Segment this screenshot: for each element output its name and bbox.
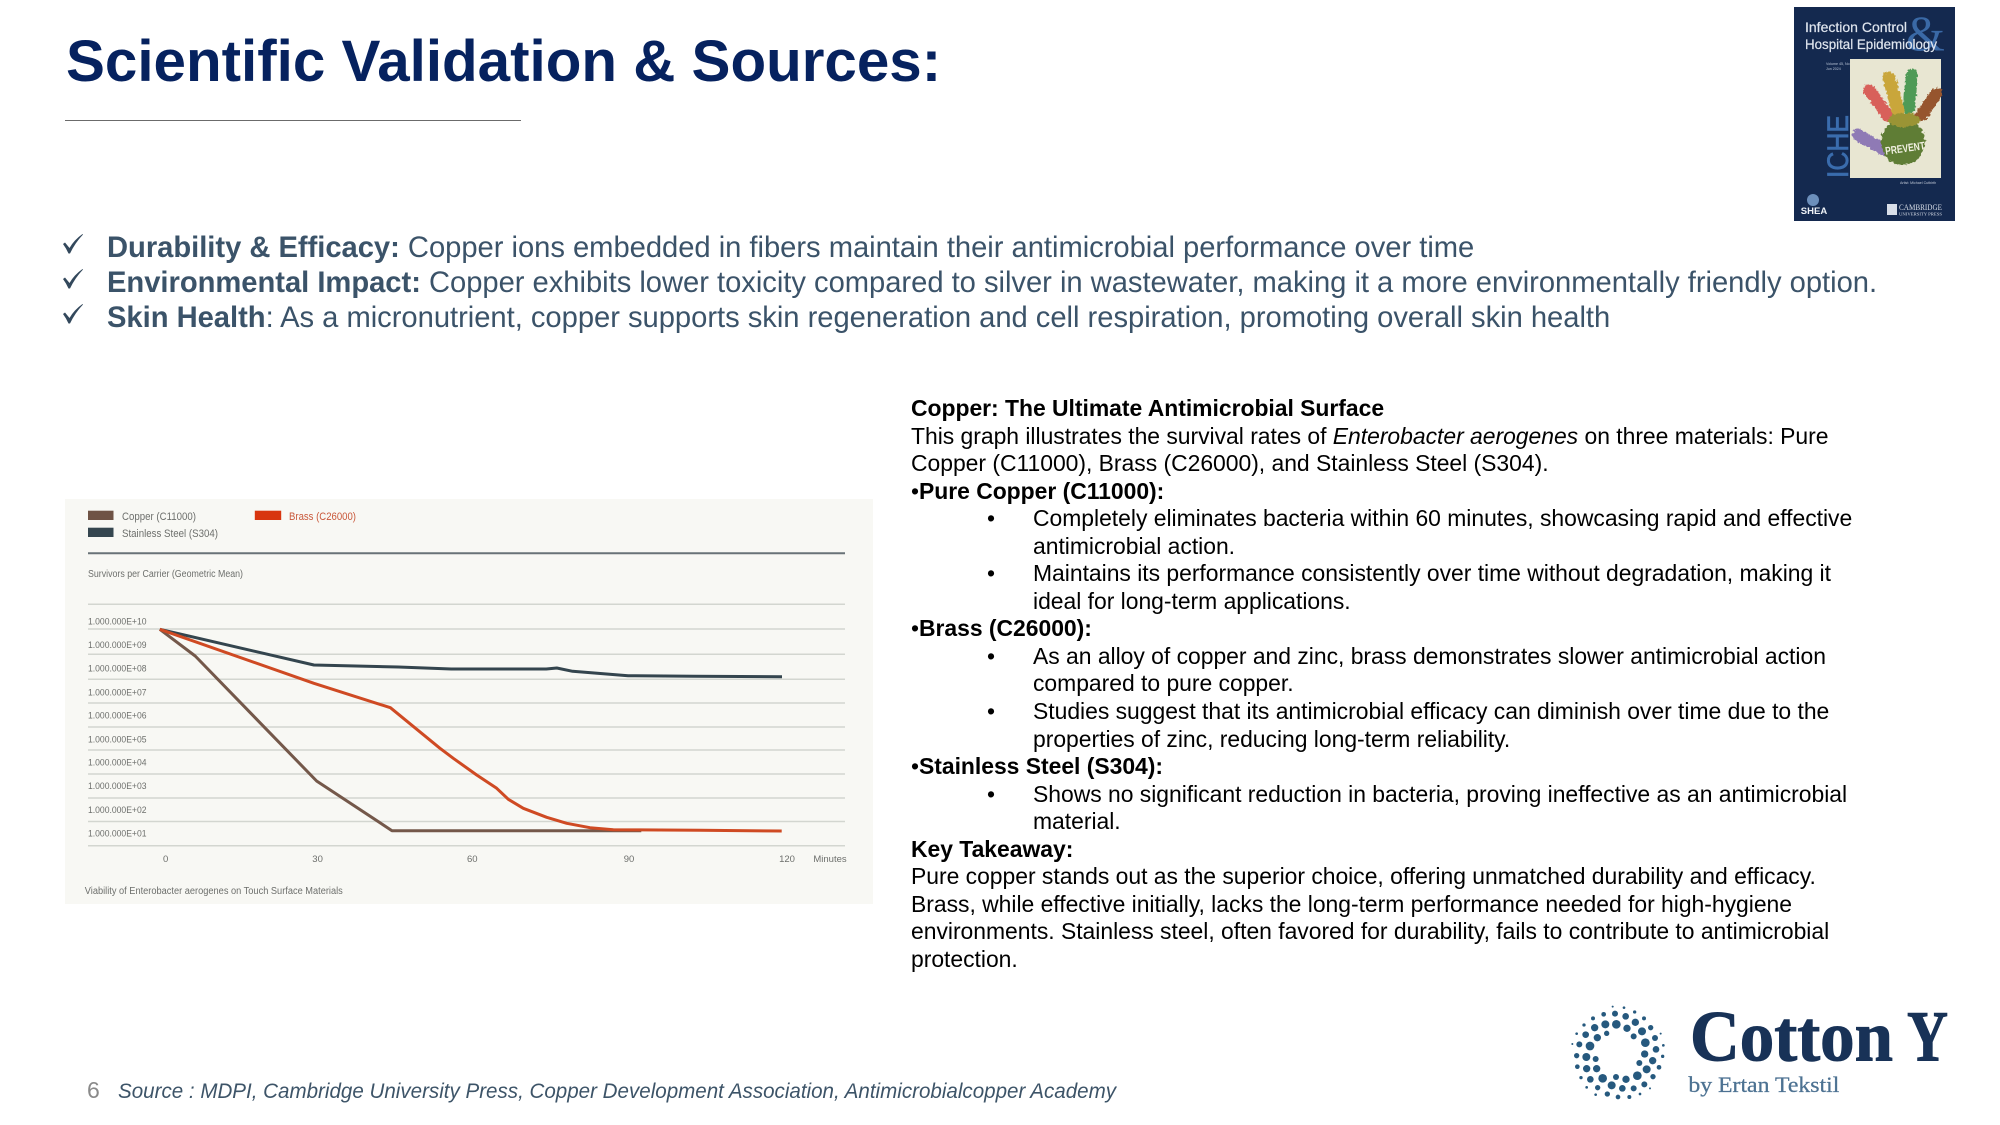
y axis labels: 1.000.000E+01 (88, 828, 146, 840)
explanatory text: Copper, the ultimate antimicrobial surface: •Brass (C26000): (911, 615, 1092, 641)
explanatory text: Copper, the ultimate antimicrobial surface: Completely eliminates bacteria within 60 minutes, showcasing rapid and effective (1033, 505, 1852, 531)
y axis labels: 1.000.000E+09 (88, 640, 146, 651)
slide number: 6 (87, 1077, 100, 1103)
logo: Cotton Y by Ertan Tekstil (1571, 997, 1948, 1100)
explanatory text: Copper, the ultimate antimicrobial surface (911, 395, 1852, 972)
explanatory text: Copper, the ultimate antimicrobial surface: Key Takeaway: (911, 836, 1073, 862)
x axis labels: Minutes (813, 854, 847, 865)
explanatory text: Copper, the ultimate antimicrobial surface: •Pure Copper (C11000): (911, 478, 1164, 504)
icon: check mark (63, 269, 83, 288)
series: copper (160, 629, 641, 831)
chart legend: Copper (C11000) (122, 511, 196, 523)
x axis labels: 90 (624, 854, 634, 865)
explanatory text: Copper, the ultimate antimicrobial surface: compared to pure copper. (1033, 670, 1294, 696)
explanatory text: Copper, the ultimate antimicrobial surface: antimicrobial action. (1033, 533, 1235, 559)
benefit: environmental impact: Environmental Impact: Copper exhibits lower toxicity compared to silver in wastewater, making it a more environmentally friendly option. (107, 267, 1877, 299)
y axis labels: 1.000.000E+02 (88, 805, 146, 816)
chart caption: Viability of Enterobacter aerogenes on Touch Surface Materials (85, 886, 343, 897)
x axis labels: 120 (779, 854, 795, 865)
journal cover: Infection Control & Hospital Epidemiology: Volume 45, No 6 (1826, 62, 1853, 66)
journal cover: Infection Control & Hospital Epidemiology: Infection Control (1805, 19, 1907, 35)
chart legend: Brass (C26000) (289, 511, 356, 523)
explanatory text: Copper, the ultimate antimicrobial surface: Studies suggest that its antimicrobial efficacy can diminish over time due to the (1033, 698, 1829, 724)
explanatory text: Copper, the ultimate antimicrobial surface: As an alloy of copper and zinc, brass demonstrates slower antimicrobial action (1033, 643, 1826, 669)
y axis labels (88, 616, 146, 840)
chart legend (88, 511, 356, 540)
explanatory text: Copper, the ultimate antimicrobial surface: • (987, 643, 995, 669)
explanatory text: Copper, the ultimate antimicrobial surface: This graph illustrates the survival rates of Enterobacter aerogenes on three materials: Pure (911, 423, 1828, 449)
explanatory text: Copper, the ultimate antimicrobial surface: Pure copper stands out as the superior choice, offering unmatched durability and efficacy. (911, 863, 1816, 889)
explanatory text: Copper, the ultimate antimicrobial surface: Maintains its performance consistently over time without degradation, making it (1033, 560, 1831, 586)
icon: check mark (63, 304, 83, 324)
journal cover: Infection Control & Hospital Epidemiology: SHEA (1801, 206, 1827, 217)
y axis labels: 1.000.000E+06 (88, 710, 146, 722)
y axis labels: 1.000.000E+03 (88, 781, 146, 792)
benefit: durability: Durability & Efficacy: Copper ions embedded in fibers maintain their antimicrobial performance over time (107, 232, 1474, 264)
explanatory text: Copper, the ultimate antimicrobial surface: Copper: The Ultimate Antimicrobial Surface (911, 395, 1384, 421)
journal cover: Infection Control & Hospital Epidemiology: ICHE (1822, 115, 1855, 178)
explanatory text: Copper, the ultimate antimicrobial surface: protection. (911, 946, 1018, 972)
y axis labels: 1.000.000E+08 (88, 664, 146, 674)
explanatory text: Copper, the ultimate antimicrobial surface: • (987, 698, 995, 724)
x axis labels: 0 (163, 854, 168, 865)
series: brass (160, 629, 782, 831)
x axis labels (163, 854, 847, 865)
x axis labels: 60 (467, 854, 478, 865)
icon: dotted ring (1571, 1006, 1665, 1099)
y axis labels: 1.000.000E+05 (88, 734, 146, 746)
logo: Cotton Y by Ertan Tekstil: Y (1907, 997, 1948, 1077)
explanatory text: Copper, the ultimate antimicrobial surface: • (987, 560, 995, 586)
explanatory text: Copper, the ultimate antimicrobial surface: Shows no significant reduction in bacteria, proving ineffective as an antimicrobial (1033, 781, 1847, 807)
explanatory text: Copper, the ultimate antimicrobial surface: properties of zinc, reducing long-term reliability. (1033, 726, 1510, 752)
explanatory text: Copper, the ultimate antimicrobial surface: •Stainless Steel (S304): (911, 753, 1163, 779)
journal cover: Infection Control & Hospital Epidemiology (1794, 7, 1955, 221)
journal cover: Infection Control & Hospital Epidemiology: CAMBRIDGE (1899, 203, 1942, 212)
explanatory text: Copper, the ultimate antimicrobial surface: environments. Stainless steel, often favored for durability, fails to contribute to antimicrobial (911, 918, 1829, 944)
line chart: survivors per carrier over time (65, 499, 873, 904)
icon: check mark (63, 234, 83, 254)
journal cover: Infection Control & Hospital Epidemiology: Jun 2024 (1826, 67, 1841, 71)
y axis labels: 1.000.000E+07 (88, 688, 146, 698)
y axis labels: 1.000.000E+04 (88, 758, 146, 768)
explanatory text: Copper, the ultimate antimicrobial surface: • (987, 505, 995, 531)
journal cover: Infection Control & Hospital Epidemiology: PREVENT (1884, 140, 1926, 158)
chart legend: Stainless Steel (S304) (122, 528, 218, 540)
x axis labels: 30 (312, 854, 323, 865)
explanatory text: Copper, the ultimate antimicrobial surface: Brass, while effective initially, lacks the long-term performance needed for high-hygiene (911, 891, 1792, 917)
journal cover: Infection Control & Hospital Epidemiology: UNIVERSITY PRESS (1899, 212, 1943, 216)
line chart: survivors per carrier over time: Survivors per Carrier (Geometric Mean) (88, 569, 243, 580)
journal cover: Infection Control & Hospital Epidemiology: Hospital Epidemiology (1805, 36, 1937, 52)
source note: Source : MDPI, Cambridge University Press, Copper Development Association, Antimicrobialcopper Academy (118, 1080, 1117, 1103)
explanatory text: Copper, the ultimate antimicrobial surface: ideal for long-term applications. (1033, 588, 1351, 614)
logo: Cotton Y by Ertan Tekstil: Cotton (1690, 997, 1893, 1077)
logo: Cotton Y by Ertan Tekstil: by Ertan Tekstil (1688, 1072, 1839, 1097)
series: stainless steel (160, 629, 782, 677)
title: Scientific Validation & Sources: (66, 29, 941, 94)
y axis labels: 1.000.000E+10 (88, 616, 146, 628)
journal cover: Infection Control & Hospital Epidemiology: Artist: Michael Cutbirth (1900, 181, 1936, 185)
explanatory text: Copper, the ultimate antimicrobial surface: Copper (C11000), Brass (C26000), and Stainless Steel (S304). (911, 450, 1549, 476)
explanatory text: Copper, the ultimate antimicrobial surface: material. (1033, 808, 1121, 834)
key benefits checklist (63, 232, 1877, 334)
explanatory text: Copper, the ultimate antimicrobial surface: • (987, 781, 995, 807)
benefit: skin health: Skin Health: As a micronutrient, copper supports skin regeneration and cell respiration, promoting overall skin health (107, 302, 1610, 334)
